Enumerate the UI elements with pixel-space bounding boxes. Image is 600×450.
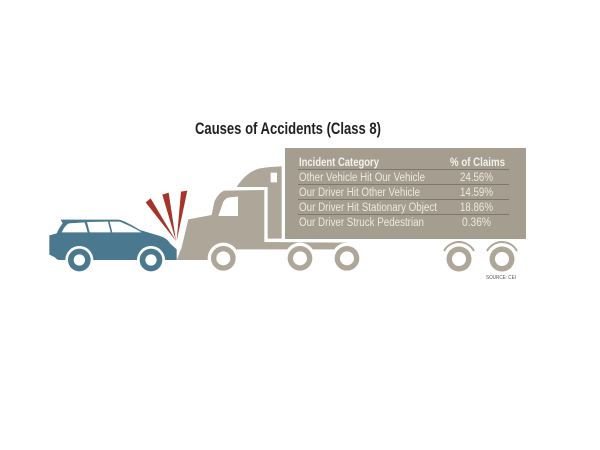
icon: truck cab xyxy=(177,166,363,274)
table rows: Our Driver Hit Stationary Object xyxy=(299,202,438,214)
table rows: 0.36% xyxy=(462,217,491,229)
icon: trailer wheels xyxy=(444,242,517,272)
table rows xyxy=(299,172,493,229)
table header: % of Claims xyxy=(450,157,505,169)
table rows: 14.59% xyxy=(460,187,493,199)
car windows xyxy=(62,222,142,232)
icon: impact lines xyxy=(146,191,187,241)
cab windows xyxy=(218,173,277,216)
title: Causes of Accidents (Class 8) xyxy=(195,120,381,138)
truck wheels xyxy=(208,243,363,274)
source note: SOURCE: CEI xyxy=(486,275,516,281)
table rows: Other Vehicle Hit Our Vehicle xyxy=(299,172,425,184)
table header xyxy=(299,157,505,169)
table rows: Our Driver Struck Pedestrian xyxy=(299,217,424,229)
icon: car xyxy=(49,220,177,274)
table rows: 18.86% xyxy=(460,202,493,214)
table header: Incident Category xyxy=(299,157,379,169)
car wheels xyxy=(65,246,165,274)
table rows: Our Driver Hit Other Vehicle xyxy=(299,187,420,199)
panel: trailer table xyxy=(285,148,526,239)
sleeper xyxy=(237,166,282,239)
table rows: 24.56% xyxy=(460,172,493,184)
